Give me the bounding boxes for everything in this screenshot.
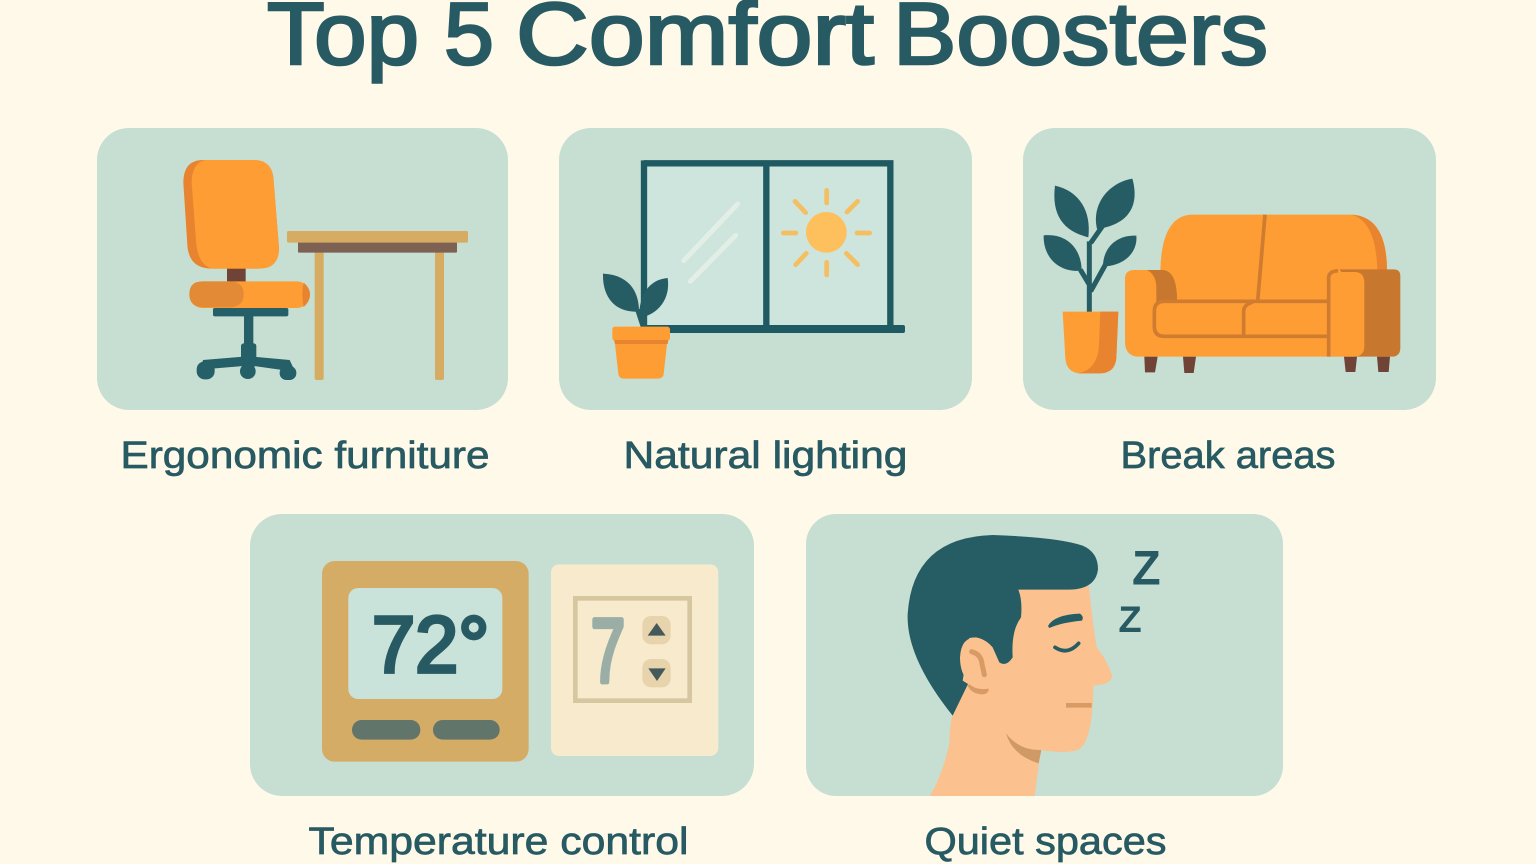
- icon: letters Z: [1118, 541, 1161, 640]
- reading: partial digit: 7: [591, 602, 625, 702]
- panel: temperature control: [250, 514, 754, 796]
- icon: desk: [287, 231, 468, 380]
- icon: wall thermostat: [551, 564, 718, 756]
- label: ergonomic furniture: Ergonomic furniture: [120, 435, 490, 477]
- label: natural lighting: Natural lighting: [624, 435, 908, 477]
- label: break areas: Break areas: [1120, 435, 1336, 477]
- icon: office chair: [183, 160, 310, 380]
- icon: digital thermostat: [322, 561, 529, 762]
- icon: sofa: [1125, 215, 1400, 373]
- label: temperature control: Temperature control: [308, 821, 688, 863]
- reading: 72 degrees: 72°: [372, 600, 489, 689]
- panel: quiet spaces: [806, 514, 1283, 796]
- panel: natural lighting: [559, 128, 972, 410]
- panel: ergonomic furniture: [97, 128, 508, 410]
- icon: letters Z: Z: [1118, 598, 1142, 640]
- icon: letters Z: Z: [1132, 541, 1161, 595]
- icon: plant: [1044, 179, 1136, 373]
- icon: window: [642, 160, 905, 333]
- panel: break areas: [1023, 128, 1436, 410]
- title: [267, 0, 1268, 83]
- icon: sun: [783, 190, 870, 275]
- icon: sleeping head: [908, 535, 1112, 796]
- icon: potted plant: [603, 274, 670, 379]
- label: quiet spaces: Quiet spaces: [924, 821, 1166, 863]
